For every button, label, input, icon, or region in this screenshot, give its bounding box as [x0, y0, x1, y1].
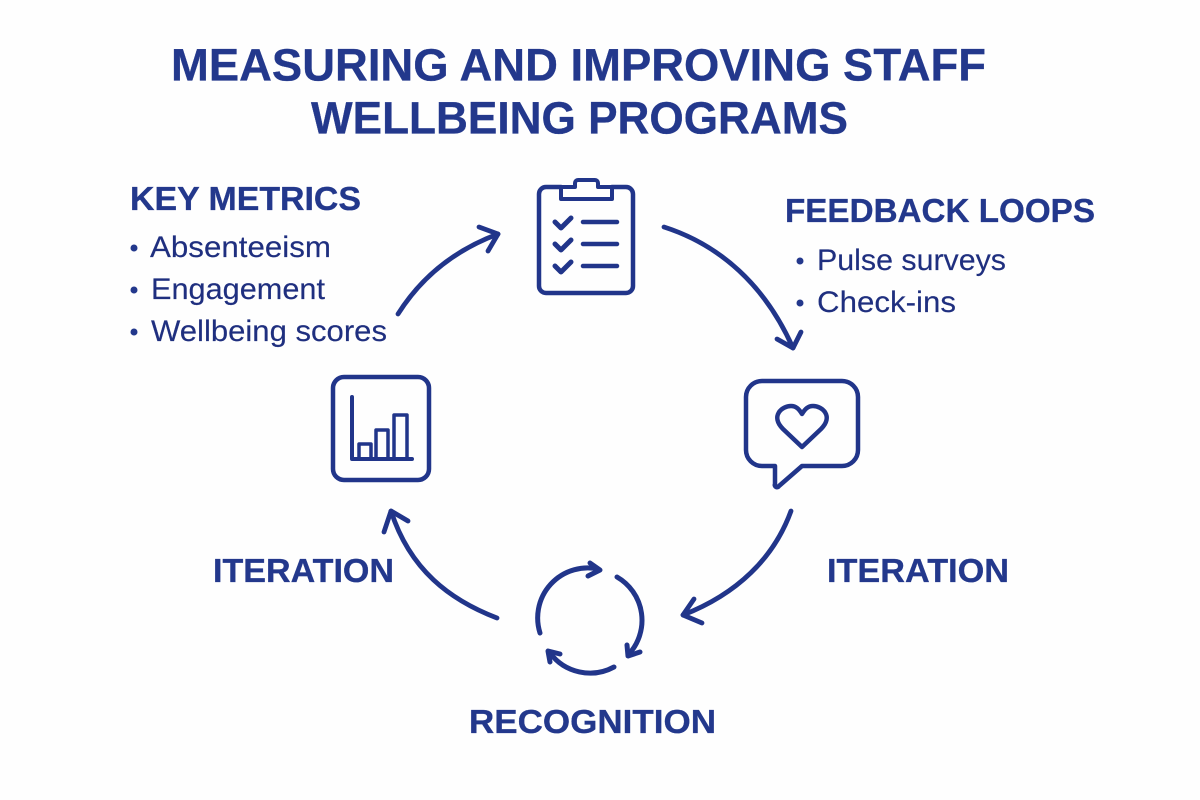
label: recognition: RECOGNITION — [469, 704, 716, 741]
arrow: recognition to chart — [384, 511, 497, 618]
list: key metrics items: Wellbeing scores — [151, 315, 387, 348]
icon: clipboard checklist — [539, 180, 633, 293]
list: feedback loops items: Check-ins — [817, 286, 956, 319]
icon: speech bubble with heart — [746, 381, 858, 487]
list: key metrics items: Absenteeism — [150, 231, 331, 264]
title: WELLBEING PROGRAMS — [311, 92, 848, 144]
label: iteration left: ITERATION — [213, 553, 394, 590]
icon: bar chart — [333, 377, 429, 480]
panel: feedback loops — [785, 193, 1095, 319]
heading: feedback loops: FEEDBACK LOOPS — [785, 193, 1095, 230]
list: key metrics items: Engagement — [151, 273, 326, 306]
list: key metrics items — [130, 231, 387, 348]
heading: key metrics: KEY METRICS — [130, 181, 361, 218]
icon: recognition cycle arrows — [538, 563, 642, 673]
title — [171, 40, 986, 144]
arrow: feedback to recognition — [683, 511, 791, 623]
arrow: clipboard to feedback — [664, 227, 801, 348]
panel: key metrics — [130, 181, 387, 348]
label: iteration right: ITERATION — [827, 553, 1009, 590]
title: MEASURING AND IMPROVING STAFF — [171, 40, 986, 90]
arrow: metrics to clipboard — [398, 227, 498, 314]
list: feedback loops items: Pulse surveys — [817, 244, 1006, 277]
list: feedback loops items — [796, 244, 1006, 319]
